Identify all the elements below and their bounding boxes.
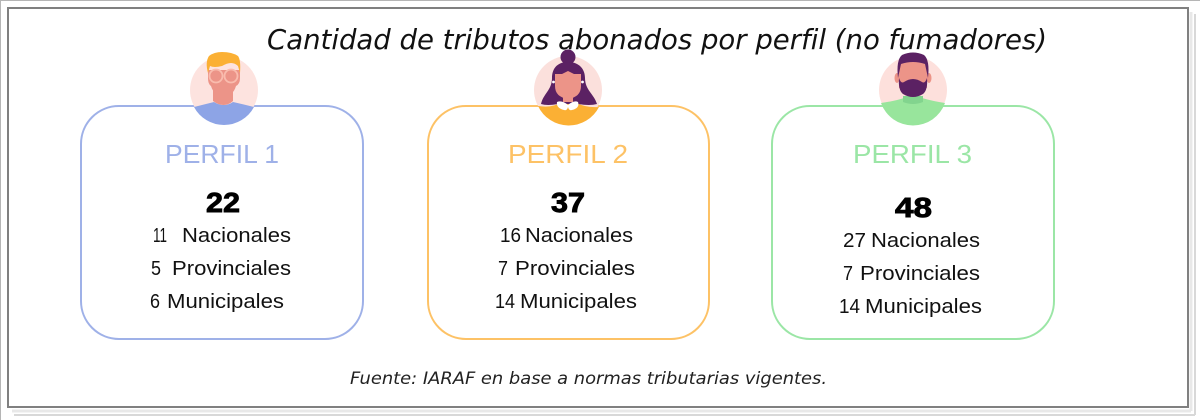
number: 22: 22 xyxy=(206,187,240,218)
heading: perfil 2: PERFIL 2 xyxy=(508,139,628,169)
text: 6 Municipales: Municipales xyxy=(167,290,284,313)
text: 7 Provinciales: Provinciales xyxy=(860,262,980,285)
text: 14 Municipales: 14 xyxy=(839,295,860,318)
icon: perfil 3 avatar xyxy=(879,52,947,126)
text: 27 Nacionales: 27 xyxy=(843,229,866,252)
panel: perfil 1 xyxy=(81,52,363,339)
text: 11 Nacionales: 11 xyxy=(153,224,167,247)
text: 7 Provinciales: 7 xyxy=(498,257,508,280)
text: 5 Provinciales: 5 xyxy=(151,257,161,280)
source note: Fuente: IARAF en base a normas tributarias vigentes. xyxy=(350,369,827,388)
panel: perfil 3 xyxy=(772,52,1054,339)
number: 37: 37 xyxy=(551,187,585,218)
heading: perfil 3: PERFIL 3 xyxy=(853,139,972,169)
text: 16 Nacionales: 16 xyxy=(500,224,521,247)
text: 27 Nacionales: Nacionales xyxy=(871,229,980,252)
text: 6 Municipales: 6 xyxy=(150,290,160,313)
icon: perfil 1 avatar xyxy=(190,52,258,125)
icon: perfil 2 avatar xyxy=(534,50,602,125)
text: 5 Provinciales: Provinciales xyxy=(172,257,291,280)
text: 14 Municipales: 14 xyxy=(495,290,515,313)
text: 14 Municipales: Municipales xyxy=(520,290,637,313)
heading: perfil 1: PERFIL 1 xyxy=(165,139,279,169)
number: 48: 48 xyxy=(895,192,932,223)
text: 16 Nacionales: Nacionales xyxy=(525,224,633,247)
panel: perfil 2 xyxy=(428,50,709,339)
text: 14 Municipales: Municipales xyxy=(865,295,982,318)
text: 7 Provinciales: 7 xyxy=(843,262,853,285)
text: 7 Provinciales: Provinciales xyxy=(515,257,635,280)
title: Cantidad de tributos abonados por perfil (no fumadores) xyxy=(267,24,1047,56)
text: 11 Nacionales: Nacionales xyxy=(182,224,291,247)
